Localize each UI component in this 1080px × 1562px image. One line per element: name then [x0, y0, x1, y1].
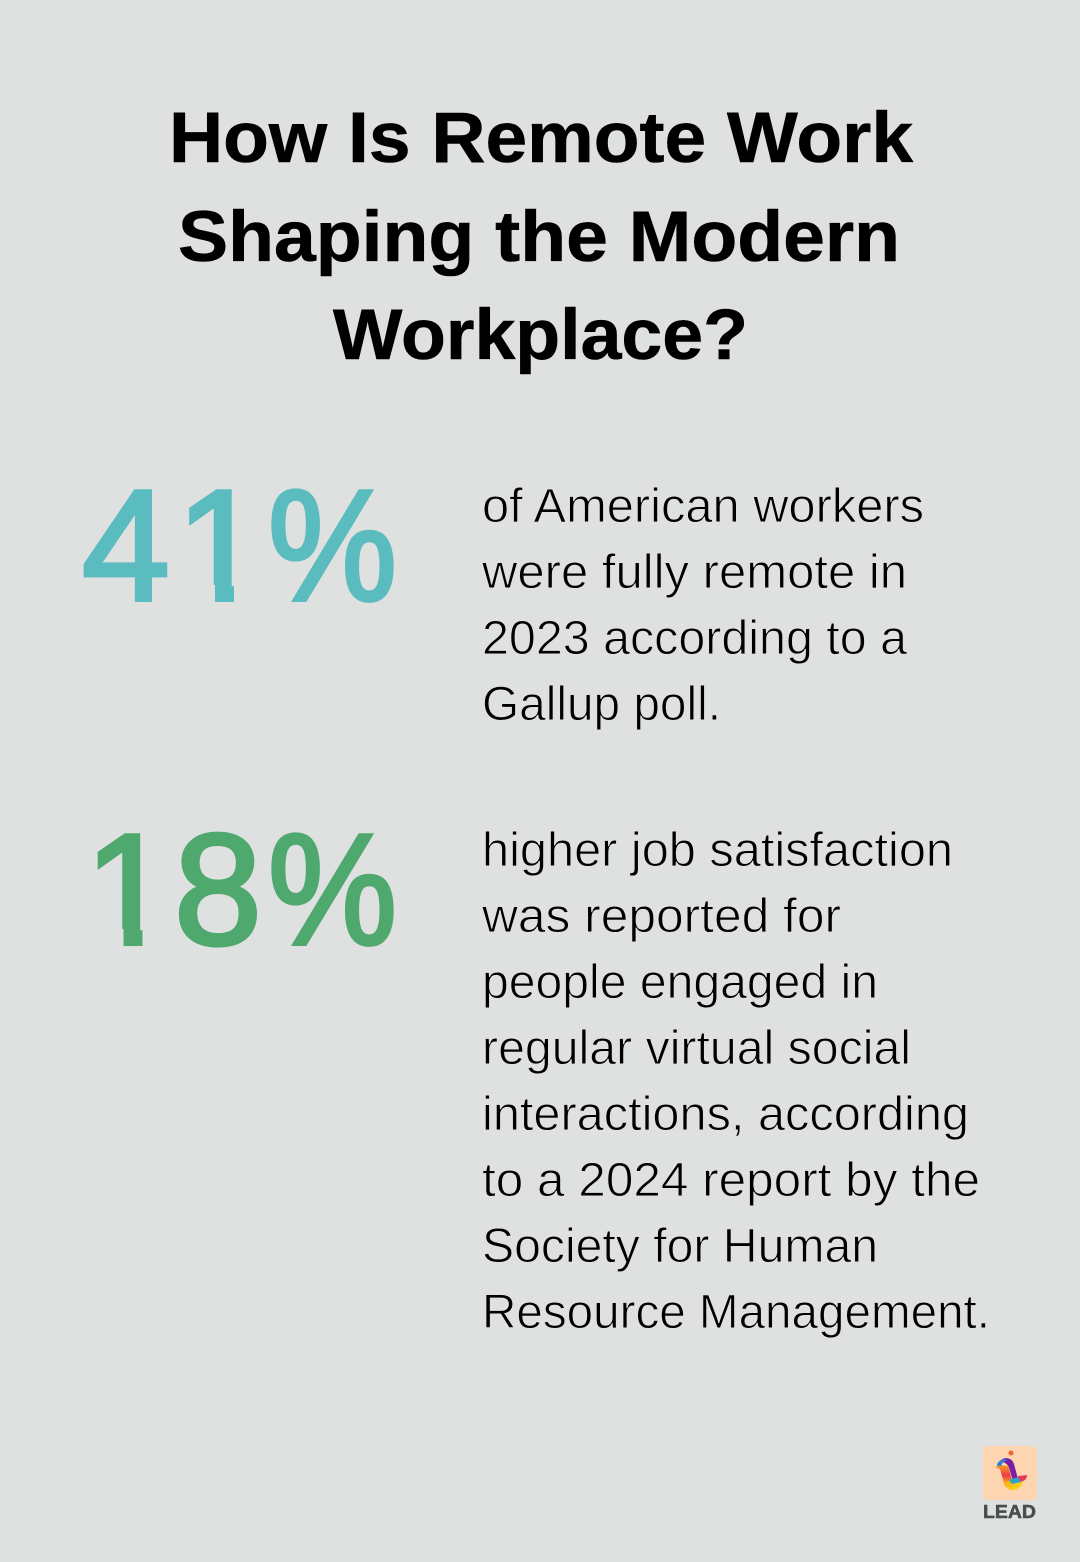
stat: 18%: % [268, 802, 397, 978]
text block: 18% description: Society for Human [482, 1220, 878, 1273]
text block: 41% description [481, 480, 924, 731]
stat: 41%: % [268, 458, 397, 634]
stat: 41%: 4 [82, 458, 170, 634]
title: Workplace? [333, 296, 748, 375]
stat: 18%: 8 [174, 802, 262, 978]
logo wordmark: LEAD [983, 1501, 1036, 1522]
stat: 18%: 1 [84, 802, 172, 978]
text block: 18% description: to a 2024 report by the [482, 1154, 980, 1207]
text block: 41% description: of American workers [482, 480, 924, 533]
stat: 18% [98, 832, 394, 948]
text block: 18% description: interactions, according [482, 1088, 969, 1141]
text block: 18% description: Resource Management. [482, 1286, 990, 1339]
text block: 18% description: was reported for [481, 890, 841, 943]
stat: 41%: 1 [176, 458, 264, 634]
text block: 41% description: were fully remote in [481, 546, 907, 599]
icon: bird mark [995, 1450, 1027, 1490]
text block: 18% description: regular virtual social [482, 1022, 911, 1075]
logo: LEAD [983, 1446, 1037, 1522]
title: Shaping the Modern [178, 198, 900, 277]
title [169, 99, 914, 375]
title: How Is Remote Work [169, 99, 914, 178]
text block: 18% description: people engaged in [482, 956, 878, 1009]
text block: 18% description: higher job satisfaction [482, 824, 953, 877]
text block: 41% description: Gallup poll. [482, 678, 721, 731]
text block: 41% description: 2023 according to a [482, 612, 907, 665]
text block: 18% description [481, 824, 990, 1339]
logo tile [983, 1446, 1037, 1500]
stat: 41% [84, 488, 394, 603]
